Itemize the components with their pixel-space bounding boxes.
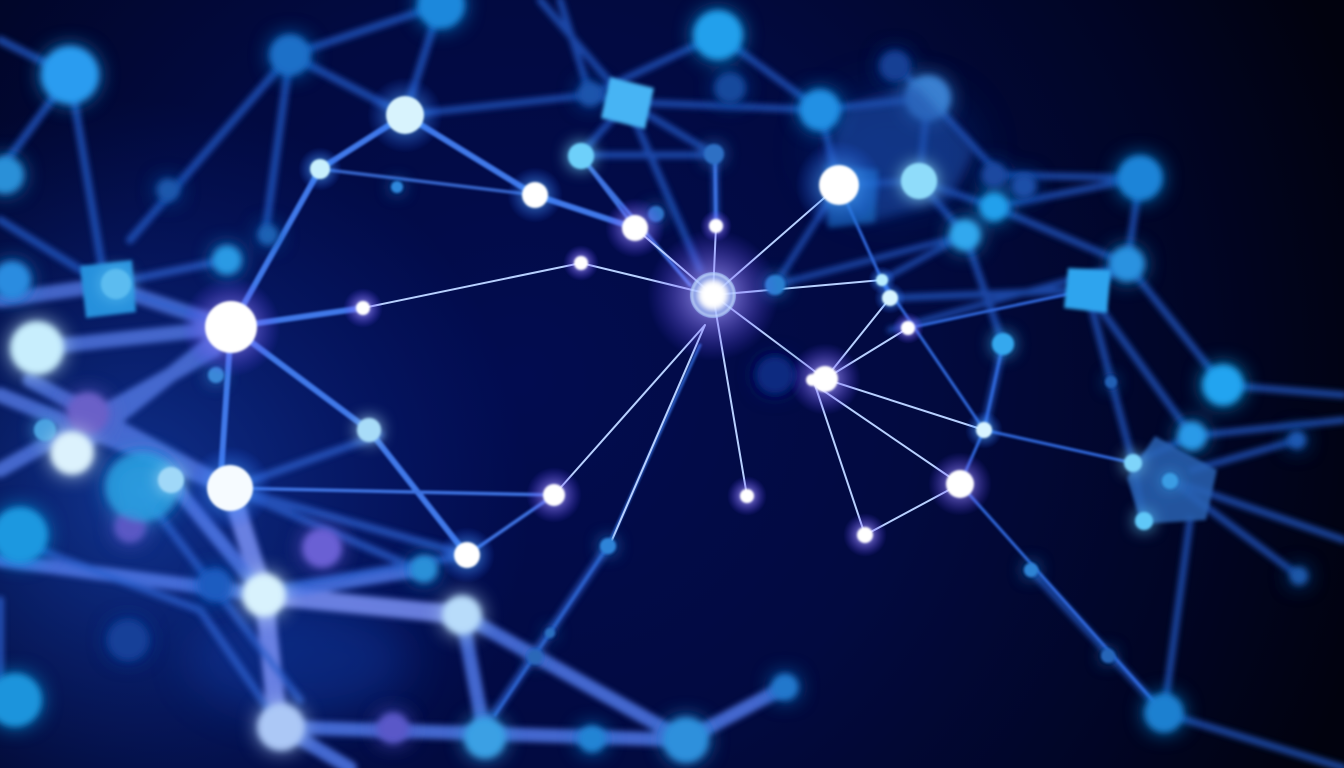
sharp foreground white-blue edges (363, 185, 984, 540)
translucent square and pentagon shapes (80, 77, 1217, 524)
blurred lower-left thick edges (0, 260, 785, 768)
bright out-of-focus nodes (11, 322, 481, 750)
square node top centre (601, 77, 654, 129)
square node left (80, 260, 136, 318)
glow halos (181, 77, 1003, 583)
blurred polygon upper right (825, 85, 975, 225)
pentagon lower right (1127, 436, 1217, 524)
sharp white nodes (205, 96, 992, 568)
square behind bright node (825, 165, 878, 228)
square node right (1064, 268, 1111, 313)
central glowing hub (690, 272, 736, 318)
light-blue mid nodes (34, 143, 1178, 664)
mid-focus network edges (220, 115, 1164, 715)
